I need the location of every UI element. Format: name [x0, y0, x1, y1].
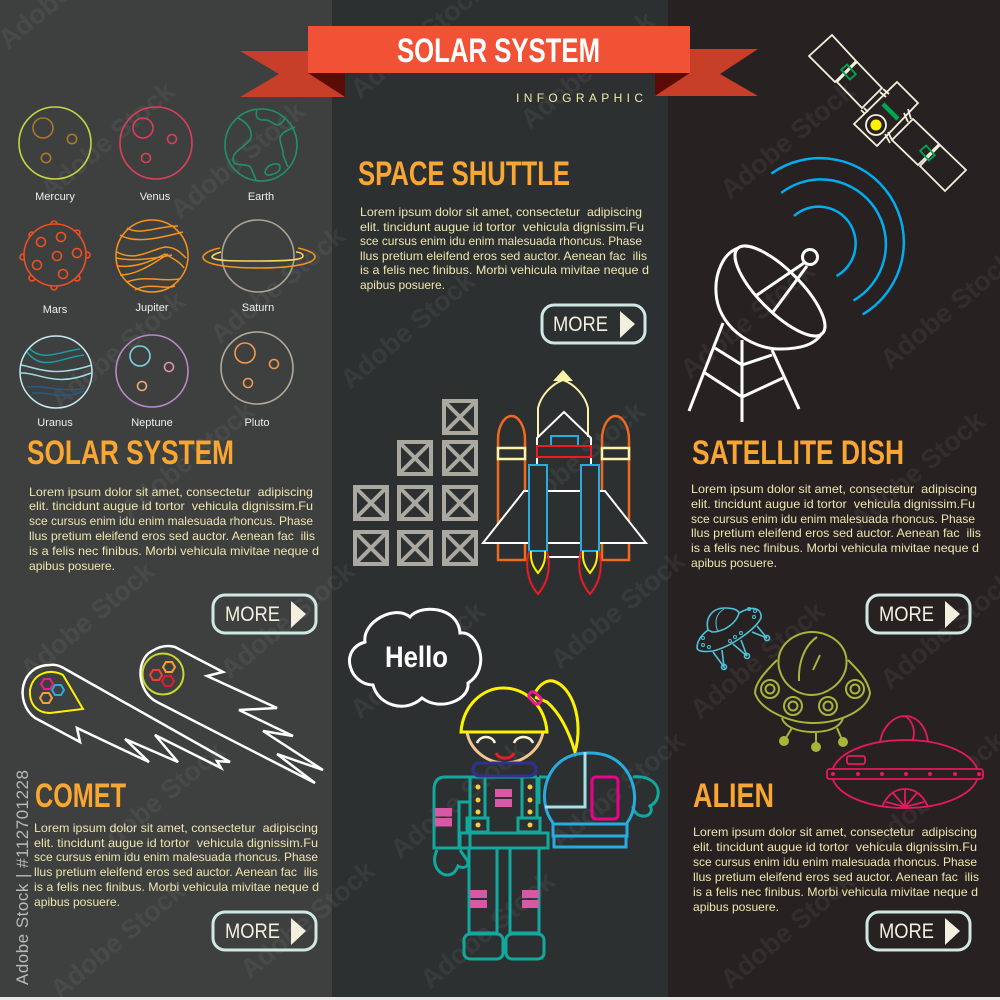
- text: Adobe Stock: [345, 595, 491, 725]
- banner title text: SOLAR SYSTEM: [397, 32, 600, 70]
- button: more (solar system): [213, 595, 316, 633]
- planet: Pluto: [221, 332, 293, 429]
- planet: Saturn: [203, 220, 315, 314]
- illustration: cargo crates: [355, 401, 476, 564]
- text block: alien: [693, 825, 979, 914]
- planet: Neptune: [116, 335, 188, 429]
- planet: Mars: Mars: [43, 304, 68, 316]
- ufo: pink: [827, 716, 983, 808]
- astronaut head: [461, 681, 578, 776]
- ufo: green: [755, 632, 870, 751]
- speech bubble: hello: [350, 609, 481, 706]
- text: Adobe Stock: [385, 735, 531, 865]
- planet: Mercury: [19, 107, 91, 203]
- illustration: alien ufos: [697, 608, 983, 808]
- text block: solar system: llus pretium eleifend eros sed auctor. Aenean fac ilis: [29, 529, 315, 543]
- planet: Earth: Earth: [248, 191, 274, 203]
- text block: alien: sce cursus enim idu enim malesuada rhoncus. Phase: [693, 855, 977, 869]
- text: Adobe Stock: [545, 545, 691, 675]
- text: Adobe Stock: [165, 95, 311, 225]
- planet: Venus: Venus: [140, 191, 171, 203]
- button: more (space shuttle): MORE: [553, 313, 608, 336]
- text block: alien: Lorem ipsum dolor sit amet, consectetur adipiscing: [693, 825, 977, 839]
- comet: right: [141, 646, 323, 783]
- hello text: Hello: [385, 641, 448, 674]
- text: Adobe Stock: [15, 555, 161, 685]
- text block: satellite dish: Lorem ipsum dolor sit amet, consectetur adipiscing: [691, 482, 977, 496]
- text: Adobe Stock: [685, 595, 831, 725]
- button: more (satellite dish): MORE: [879, 603, 934, 626]
- planet: Neptune: Neptune: [131, 417, 173, 429]
- title banner: [240, 26, 758, 97]
- comet: left: [23, 665, 230, 768]
- text block: alien: is a felis nec finibus. Morbi vehicula mivitae neque d: [693, 885, 978, 899]
- stock credit: Adobe Stock | #112701228: [13, 770, 32, 985]
- text block: comet: llus pretium eleifend eros sed auctor. Aenean fac ilis: [34, 865, 318, 879]
- text block: comet: elit. tincidunt augue id tortor vehicula dignissim.Fu: [34, 836, 318, 850]
- text: Adobe Stock: [545, 725, 691, 855]
- button: more (comet): MORE: [225, 920, 280, 943]
- text block: space shuttle: is a felis nec finibus. Morbi vehicula mivitae neque d: [360, 263, 649, 277]
- button: more (alien): [867, 912, 970, 950]
- suit buttons: [476, 784, 532, 828]
- planet: Jupiter: Jupiter: [135, 302, 169, 314]
- text block: satellite dish: [691, 482, 981, 570]
- text: Adobe Stock: [335, 265, 481, 395]
- text block: solar system: elit. tincidunt augue id tortor vehicula dignissim.Fu: [29, 499, 313, 513]
- panel: planets: [19, 107, 315, 429]
- text: Adobe Stock: [115, 395, 261, 525]
- button: more (solar system): MORE: [225, 603, 280, 626]
- text block: space shuttle: sce cursus enim idu enim malesuada rhoncus. Phase: [360, 234, 642, 248]
- heading: satellite dish: SATELLITE DISH: [692, 434, 904, 472]
- text: Adobe Stock: [235, 855, 381, 985]
- text: Adobe Stock: [45, 285, 191, 415]
- illustration: comets: [23, 646, 323, 783]
- text block: solar system: sce cursus enim idu enim malesuada rhoncus. Phase: [29, 514, 313, 528]
- text: Adobe Stock: [715, 865, 861, 995]
- text block: satellite dish: elit. tincidunt augue id tortor vehicula dignissim.Fu: [691, 497, 975, 511]
- planet: Jupiter: [116, 220, 188, 314]
- planet: Pluto: Pluto: [244, 417, 270, 429]
- heading: comet: COMET: [35, 777, 126, 815]
- text block: space shuttle: elit. tincidunt augue id tortor vehicula dignissim.Fu: [360, 220, 644, 234]
- text block: solar system: is a felis nec finibus. Morbi vehicula mivitae neque d: [29, 544, 319, 558]
- text: Adobe Stock: [675, 255, 821, 385]
- text block: solar system: apibus posuere.: [29, 559, 115, 573]
- planet: Uranus: Uranus: [37, 417, 73, 429]
- text: Adobe Stock: [515, 5, 661, 135]
- illustration: astronaut: [434, 681, 658, 959]
- text: Adobe Stock: [415, 865, 561, 995]
- illustration: space shuttle: [483, 370, 646, 594]
- heading: solar system: SOLAR SYSTEM: [27, 434, 234, 472]
- text block: space shuttle: [360, 205, 649, 292]
- text block: space shuttle: llus pretium eleifend eros sed auctor. Aenean fac ilis: [360, 249, 647, 263]
- astronaut helmet: [545, 752, 635, 847]
- illustration: satellite dish: [689, 234, 837, 422]
- text block: satellite dish: apibus posuere.: [691, 556, 777, 570]
- text block: solar system: Lorem ipsum dolor sit amet, consectetur adipiscing: [29, 485, 313, 499]
- text block: alien: elit. tincidunt augue id tortor vehicula dignissim.Fu: [693, 840, 977, 854]
- illustration: signal waves: [771, 158, 904, 314]
- button: more (alien): MORE: [879, 920, 934, 943]
- text block: comet: Lorem ipsum dolor sit amet, consectetur adipiscing: [34, 821, 318, 835]
- text: Adobe Stock: [505, 395, 651, 525]
- ufo: small blue: [697, 608, 770, 670]
- text: Adobe Stock: [715, 75, 861, 205]
- text: Adobe Stock: [215, 555, 361, 685]
- planet: Earth: [225, 109, 297, 203]
- text: Adobe Stock: [35, 75, 181, 205]
- planet: Uranus: [20, 336, 92, 429]
- planet: Mars: [20, 221, 90, 316]
- planet: Saturn: Saturn: [242, 302, 274, 314]
- heading: alien: ALIEN: [693, 777, 774, 815]
- button: more (comet): [213, 912, 316, 950]
- subtitle: infographic: INFOGRAPHIC: [516, 91, 643, 105]
- text block: comet: apibus posuere.: [34, 895, 120, 909]
- planet: Venus: [120, 107, 192, 203]
- text block: alien: apibus posuere.: [693, 900, 779, 914]
- text block: satellite dish: sce cursus enim idu enim malesuada rhoncus. Phase: [691, 512, 975, 526]
- text block: satellite dish: llus pretium eleifend eros sed auctor. Aenean fac ilis: [691, 526, 981, 540]
- button: more (satellite dish): [867, 595, 970, 633]
- illustration: satellite: [809, 35, 966, 191]
- text block: space shuttle: apibus posuere.: [360, 278, 445, 292]
- text block: comet: is a felis nec finibus. Morbi vehicula mivitae neque d: [34, 880, 319, 894]
- text block: solar system: [29, 485, 319, 573]
- text block: satellite dish: is a felis nec finibus. Morbi vehicula mivitae neque d: [691, 541, 979, 555]
- astronaut suit: [434, 777, 658, 959]
- heading: space shuttle: SPACE SHUTTLE: [358, 155, 570, 193]
- astronaut patches: [435, 789, 539, 908]
- text block: comet: [34, 821, 319, 909]
- planet: Mercury: Mercury: [35, 191, 75, 203]
- text block: space shuttle: Lorem ipsum dolor sit amet, consectetur adipiscing: [360, 205, 642, 219]
- text block: alien: llus pretium eleifend eros sed auctor. Aenean fac ilis: [693, 870, 979, 884]
- button: more (space shuttle): [542, 305, 645, 343]
- text: Adobe Stock: [845, 405, 991, 535]
- text: Adobe Stock: [85, 735, 231, 865]
- text block: comet: sce cursus enim idu enim malesuada rhoncus. Phase: [34, 850, 318, 864]
- text: Adobe Stock: [205, 220, 351, 350]
